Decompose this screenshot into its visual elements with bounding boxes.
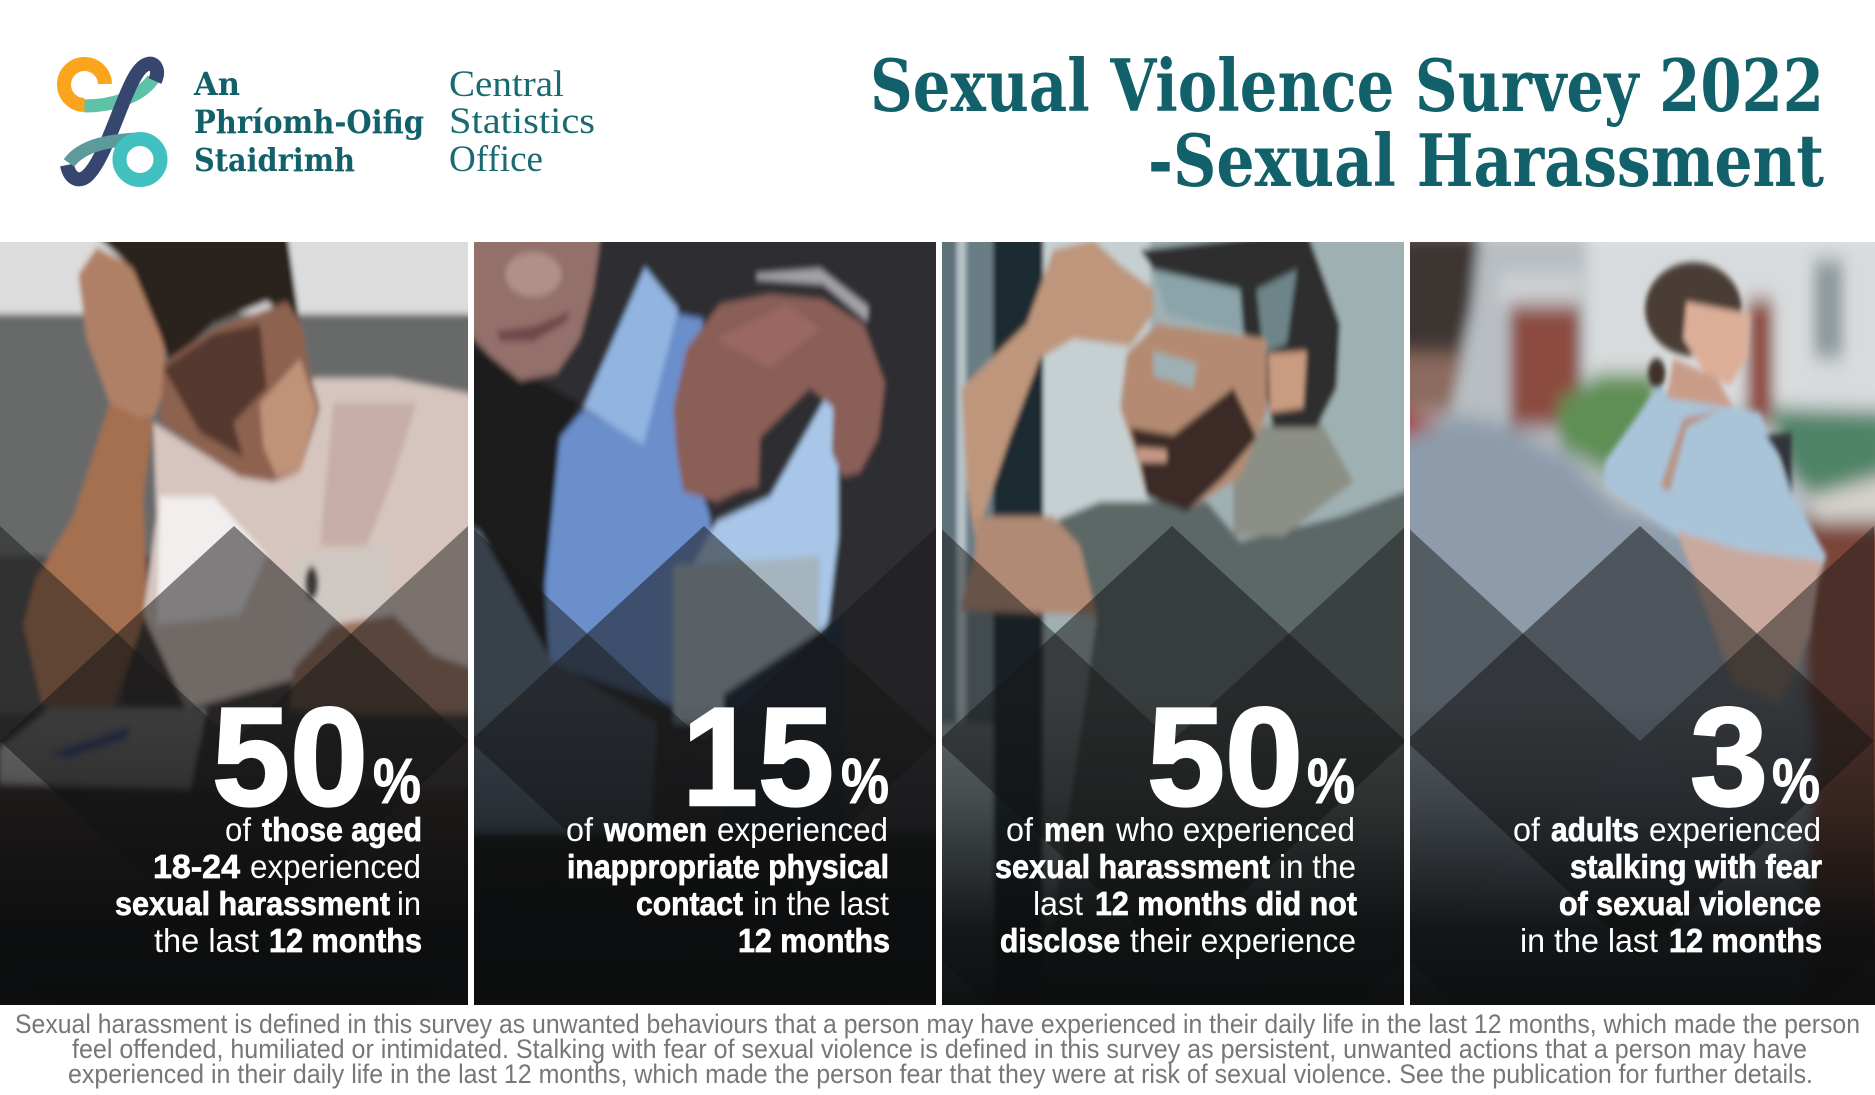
logo text: Irish name: [193, 65, 424, 179]
photo: man leaning at window: [942, 242, 1404, 982]
description: 12 months: [1669, 922, 1822, 959]
logo text: Irish name: An: [193, 65, 240, 103]
statistic: 50%: %: [373, 745, 421, 817]
title: [870, 43, 1824, 203]
statistic: 50%: [214, 706, 420, 808]
overlay: translucent diamonds: [0, 526, 468, 1005]
description: 18-24: [153, 848, 241, 885]
panel: those aged 18-24: [0, 230, 490, 1005]
panel: adults: [1390, 230, 1875, 1005]
icon: knot symbol: [64, 64, 160, 180]
description: of: [1006, 811, 1034, 848]
statistic: 15%: [689, 707, 888, 808]
statistic: 3%: 3: [1690, 678, 1768, 835]
description: contact: [636, 885, 743, 922]
logo text: English name: Central: [449, 64, 564, 105]
sharp woman: [1605, 262, 1827, 704]
statistic: 50%: %: [1307, 745, 1355, 817]
statistic: 3%: %: [1772, 745, 1820, 817]
description: sexual harassment: [995, 848, 1270, 885]
statistic: 50%: 50: [212, 678, 368, 835]
logo text: English name: Statistics: [449, 101, 595, 142]
logo text: English name: Office: [449, 139, 543, 180]
description: adults: [1551, 811, 1639, 848]
description: of: [225, 811, 252, 848]
statistic: 50%: 50: [1147, 678, 1303, 835]
footnote: [15, 1009, 1860, 1089]
logo: Central Statistics Office: [64, 64, 595, 180]
photo: woman looking back at a man following: [1390, 230, 1875, 1005]
description: of sexual violence: [1559, 885, 1821, 922]
statistic: 3%: [1692, 706, 1819, 808]
footnote: feel offended, humiliated or intimidated. Stalking with fear of sexual violence is defined in this survey as persistent, unwanted actions that a person may have: [72, 1034, 1807, 1064]
panel: women: [460, 230, 960, 1005]
description: stalking with fear: [1570, 848, 1822, 885]
description: of: [566, 811, 594, 848]
logo text: Irish name: Staidrimh: [194, 141, 355, 179]
statistic: 50%: [1150, 706, 1354, 808]
overlay: translucent diamonds: [1406, 526, 1875, 1005]
description: in: [397, 885, 421, 922]
description: disclose: [1000, 922, 1120, 959]
description: 12 months did not: [1095, 885, 1357, 922]
description: inappropriate physical: [567, 848, 889, 885]
statistic: 15%: 15: [682, 678, 834, 835]
description: of: [1513, 811, 1541, 848]
description: the last: [154, 922, 259, 959]
description: in the: [1279, 848, 1356, 885]
overlay: translucent diamonds: [938, 526, 1406, 1005]
overlay: translucent diamonds: [470, 526, 938, 1005]
logo text: English name: [449, 64, 595, 180]
statistic: 15%: %: [841, 745, 889, 817]
description: in the last: [753, 885, 889, 922]
description: experienced: [717, 811, 888, 848]
photo: worried young man with phone: [0, 230, 490, 1005]
logo text: Irish name: Phríomh-Oifig: [194, 103, 424, 141]
description: women: [603, 811, 707, 848]
description: their experience: [1130, 922, 1356, 959]
description: 12 months: [738, 922, 890, 959]
photo: hand on woman's shoulder: [474, 242, 936, 994]
description: sexual harassment: [115, 885, 390, 922]
blurred background: [1390, 230, 1875, 1005]
description: those aged: [262, 811, 422, 848]
description: experienced: [250, 848, 421, 885]
description: last: [1033, 885, 1083, 922]
description: 12 months: [269, 922, 422, 959]
panel: men: [930, 230, 1430, 1005]
description: who experienced: [1115, 811, 1355, 848]
description: in the last: [1520, 922, 1658, 959]
footnote: experienced in their daily life in the last 12 months, which made the person fear that they were at risk of sexual violence. See the publication for further details.: [68, 1059, 1813, 1089]
description: experienced: [1649, 811, 1821, 848]
description: men: [1044, 811, 1105, 848]
